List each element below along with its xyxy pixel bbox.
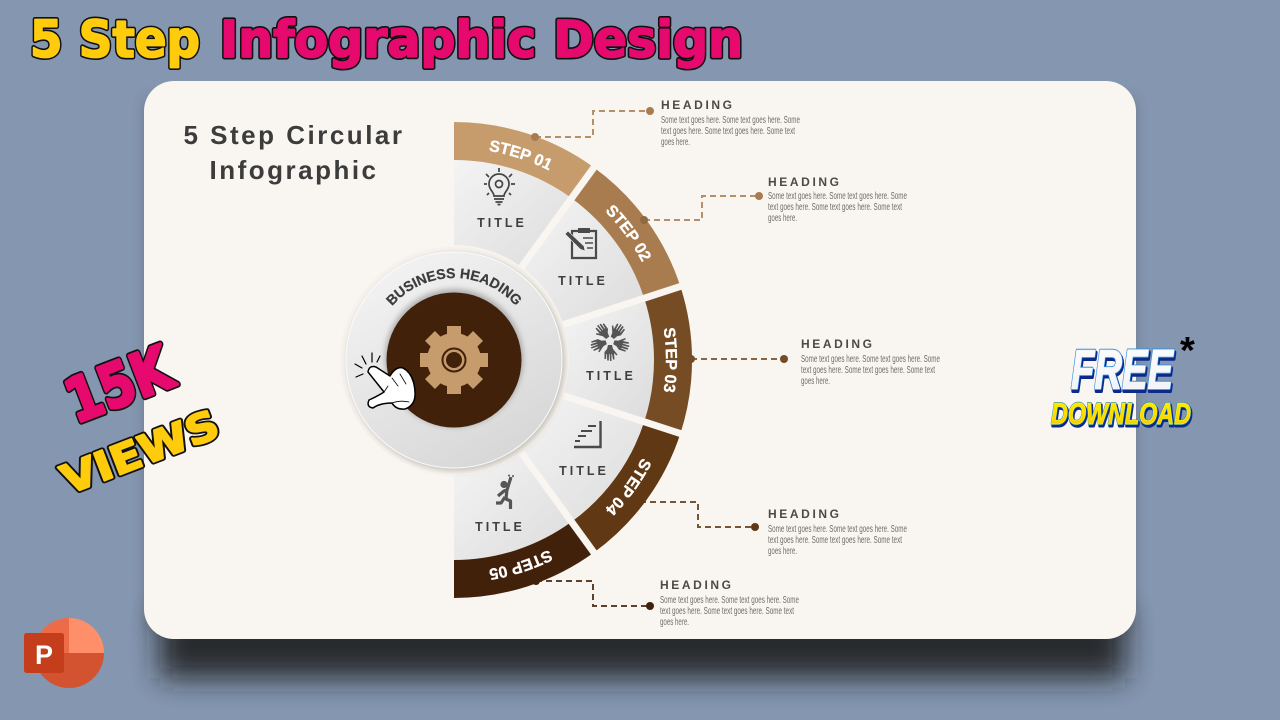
icon: five hands [589,320,631,361]
text block 1: goes here. [661,137,690,148]
step labels: STEP 04 [606,459,651,516]
icon: pointing hand [355,353,415,409]
text block 4: Some text goes here. Some text goes here. Some [768,524,907,535]
text block 4: text goes here. Some text goes here. Some text [768,535,902,546]
text block 5: goes here. [660,617,689,628]
center disc halo [340,246,568,474]
connector step 03 [687,355,788,363]
text block 1: text goes here. Some text goes here. Some text [661,126,795,137]
text block 3 [801,337,940,387]
text block 5: HEADING [660,578,731,592]
text block 2: text goes here. Some text goes here. Some text [768,202,902,213]
step labels: STEP 02 [606,205,651,262]
step labels: STEP 01 [489,140,552,170]
text block 5: Some text goes here. Some text goes here. Some [660,595,799,606]
card shadow [146,100,1134,678]
segment titles: TITLE [586,369,636,383]
band step 01 [454,122,594,198]
band step 03 [644,286,692,434]
segment titles: TITLE [558,274,608,288]
dark hub [386,292,522,428]
icon: clipboard [565,228,596,258]
text block 4: HEADING [768,507,839,521]
icon: light bulb [484,168,515,204]
connector step 05 [532,577,654,610]
gray segment 4 [522,396,644,522]
gray segment 3 [563,298,654,422]
title: Infographic Design: Infographic Design [220,11,743,70]
card heading: Infographic [209,155,379,185]
step labels: STEP 03 [664,328,678,392]
icon: PowerPoint logo [24,618,104,688]
icon: stairs [574,421,600,447]
circular diagram [344,122,692,598]
DOWNLOAD: DOWNLOAD [1051,396,1191,431]
gray segment 1 [454,160,572,267]
title: 5 Step: 5 Step [30,11,200,70]
band step 04 [572,422,680,552]
text block 1: Some text goes here. Some text goes here. Some [661,115,800,126]
text block 4 [768,507,907,557]
VIEWS: VIEWS [55,402,226,504]
asterisk: * [1180,330,1195,372]
text block 2: goes here. [768,213,797,224]
icon: gear [420,326,488,394]
text block 2: Some text goes here. Some text goes here. Some [768,191,907,202]
15K: 15K [56,333,184,437]
segment titles [475,216,636,534]
FREE: FREE [1072,340,1175,403]
text block 3: HEADING [801,337,872,351]
text block 5 [660,578,799,628]
card heading: 5 Step Circular [183,120,405,150]
segment titles: TITLE [559,464,609,478]
icon: PowerPoint logo: P [35,640,53,670]
DOWNLOAD: DOWNLOAD [1052,398,1192,433]
center disc [346,252,562,468]
dark hub shadow [385,289,523,427]
title: Infographic Design: Infographic Design [220,11,743,70]
card heading [183,120,405,185]
DOWNLOAD: DOWNLOAD [1051,396,1191,431]
text block 3: text goes here. Some text goes here. Some text [801,365,935,376]
text block 3: goes here. [801,376,830,387]
text block 1: HEADING [661,98,732,112]
text block 1 [661,98,800,148]
main title [30,11,743,70]
segment titles: TITLE [475,520,525,534]
text block 2: HEADING [768,175,839,189]
curved heading: BUSINESS HEADING [386,268,521,306]
text block 2 [768,175,907,224]
FREE: FREE [1071,338,1174,400]
gray segment 2 [522,198,644,324]
badge: 15K views [55,333,226,504]
band step 02 [572,168,680,298]
icon: person reaching [496,474,514,509]
text block 4: goes here. [768,546,797,557]
badge: free download [1051,338,1192,433]
step labels [489,140,678,580]
FREE: FREE [1071,338,1174,400]
center disc shadow [347,253,565,471]
connector step 01 [531,107,654,141]
FREE [1071,338,1175,403]
connector step 04 [636,498,759,531]
text block 3: Some text goes here. Some text goes here. Some [801,354,940,365]
VIEWS: VIEWS [55,402,226,504]
step labels: STEP 05 [489,550,552,580]
band step 05 [454,522,594,598]
segment titles: TITLE [477,216,527,230]
gray segment 5 [454,453,572,560]
connector step 02 [640,192,763,224]
15K: 15K [56,333,184,437]
main card [144,81,1136,639]
text block 5: text goes here. Some text goes here. Some text [660,606,794,617]
title: 5 Step: 5 Step [30,11,200,70]
